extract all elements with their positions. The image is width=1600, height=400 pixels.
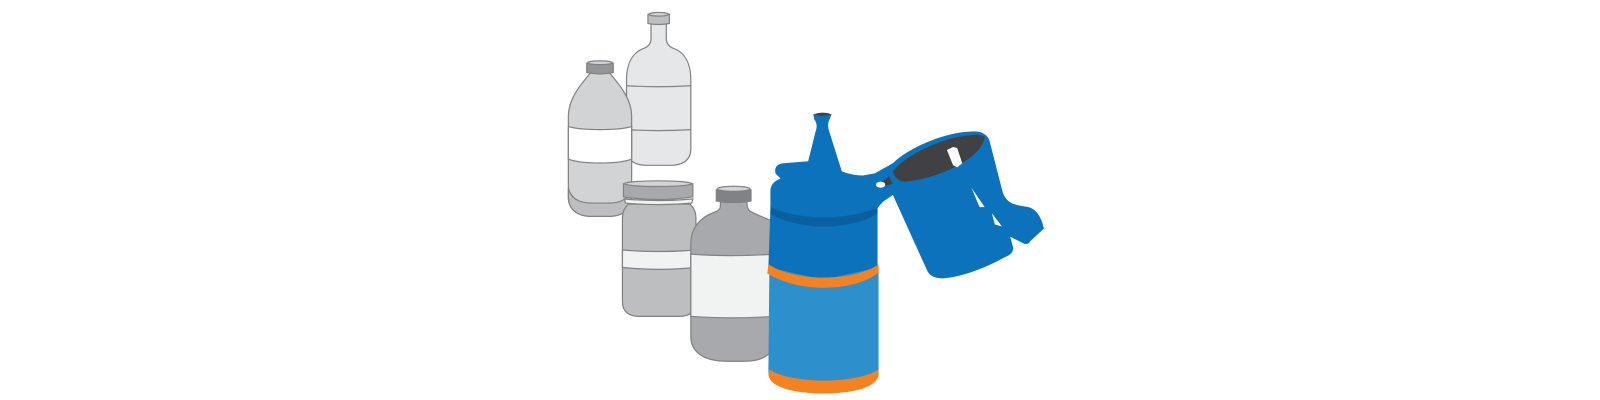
slot: white gap in interior <box>947 147 962 167</box>
bottle: dark bottle with label <box>691 186 776 361</box>
spout tip: dark opening <box>816 113 830 116</box>
lid opening: dark interior <box>893 135 985 182</box>
lid: open blue flip lid <box>863 131 1044 278</box>
bottle: wide jar <box>622 181 696 316</box>
cut: white slit one <box>971 188 985 207</box>
bottle: light tall back bottle <box>627 12 691 165</box>
band: orange bottom band <box>768 369 879 393</box>
cut: white slit two <box>992 213 1002 227</box>
hinge hole <box>876 182 885 188</box>
band: orange shoulder band <box>767 264 879 288</box>
bottle: blue bottle body <box>767 113 884 393</box>
hinge: small dark square <box>883 177 893 186</box>
cap: blue flip-top cap <box>768 113 884 280</box>
ring: dark cap ring <box>770 207 878 227</box>
bottle: left bottle with white label <box>568 61 632 216</box>
